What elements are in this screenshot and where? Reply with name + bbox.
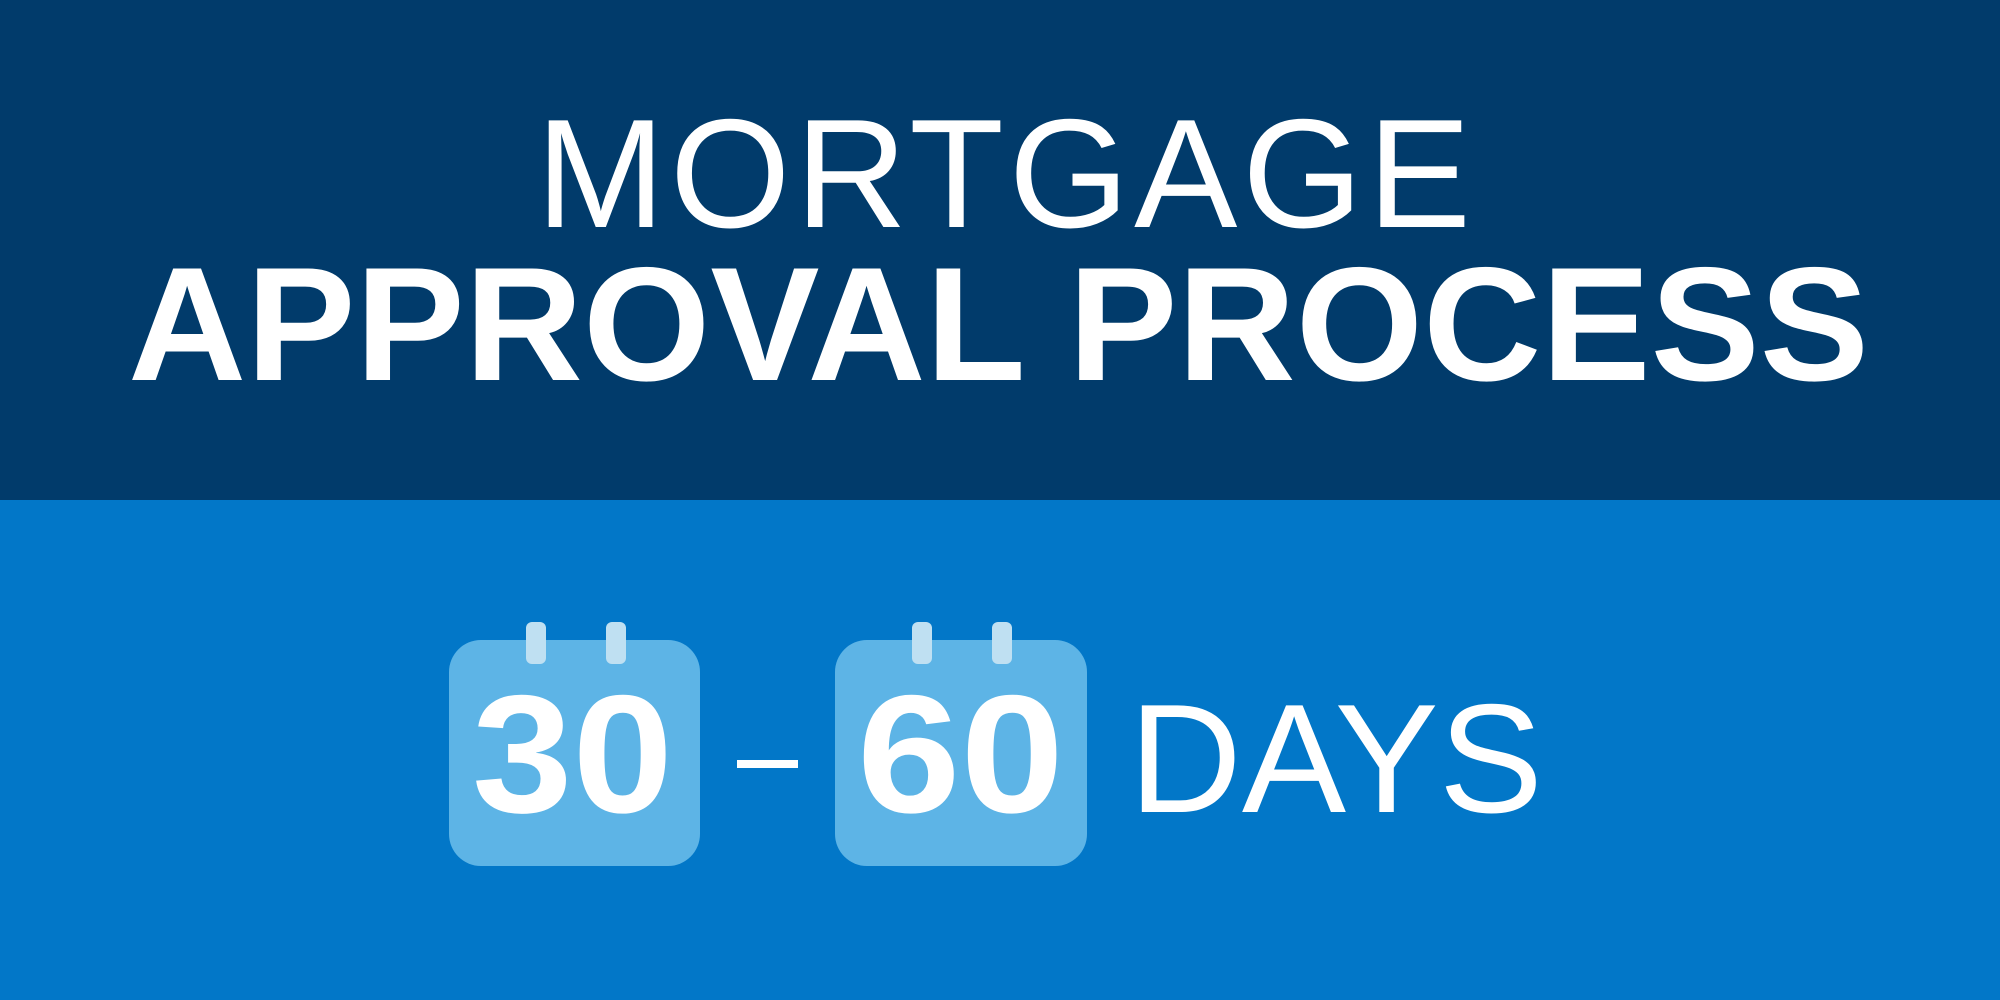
icon: calendar 30 [449,622,700,866]
title: APPROVAL PROCESS: APPROVAL PROCESS [128,234,1869,415]
text: DAYS: DAYS [1129,672,1543,845]
icon: calendar 60: 60 [857,660,1064,848]
title: MORTGAGE: MORTGAGE [536,87,1471,260]
icon: calendar 60 [835,622,1087,866]
dash [737,760,798,768]
panel: timeframe band [0,500,2000,1000]
icon: calendar 30: 30 [472,660,673,848]
